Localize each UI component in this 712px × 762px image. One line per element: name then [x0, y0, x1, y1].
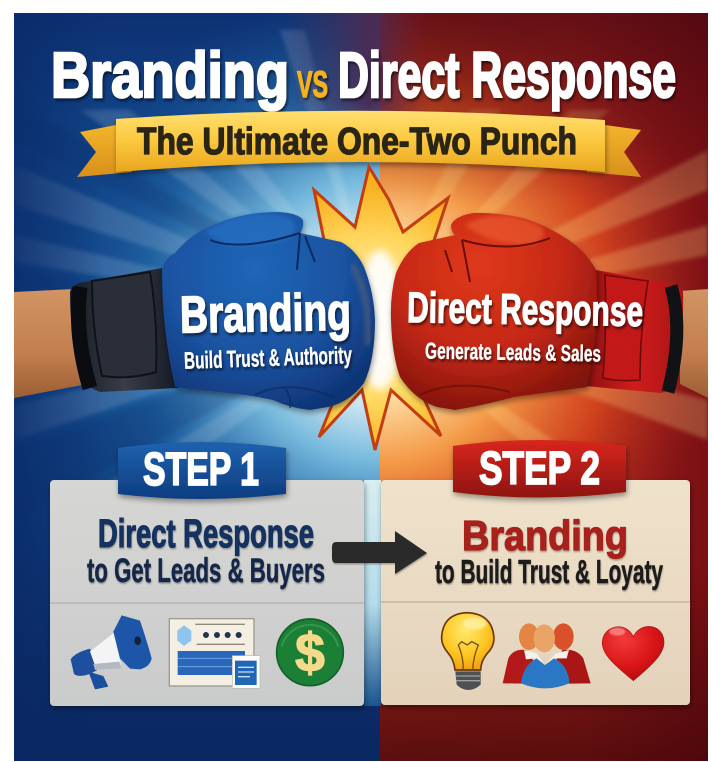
glove label: Branding: [179, 284, 353, 375]
arrow from step 1 to step 2: [332, 531, 427, 574]
impact starburst: [314, 167, 448, 450]
icon: dollar coin: $: [295, 624, 325, 683]
icon: people group: [503, 623, 591, 688]
step 1 heading: Direct Response: [98, 512, 314, 556]
banner: The Ultimate One-Two Punch: The Ultimate One-Two Punch: [137, 121, 577, 163]
left arm: [14, 289, 82, 398]
icon: heart: [602, 627, 664, 681]
title: Branding: [51, 39, 289, 111]
glove label: Direct Response: [407, 284, 643, 367]
glove label: Direct Response: Generate Leads & Sales: [425, 337, 601, 367]
icon: web form: [169, 619, 260, 688]
icon: light bulb: [442, 613, 494, 690]
glove label: Branding: Branding: [179, 284, 351, 344]
panel: step 2: [381, 480, 690, 705]
badge: step 2: STEP 2: [479, 442, 600, 494]
step 2 heading: [435, 512, 663, 590]
gap between panels: [364, 480, 381, 706]
icon: megaphone: [71, 615, 152, 689]
centre glow: [358, 250, 402, 390]
glove label: Branding: Build Trust & Authority: [184, 342, 353, 375]
step 1 heading: to Get Leads & Buyers: [87, 552, 325, 590]
right arm: [680, 289, 708, 398]
title: VS: [297, 64, 328, 105]
title: [51, 39, 676, 111]
panel: step 1: [50, 480, 364, 706]
badge: step 1: STEP 1: [143, 443, 259, 495]
step 1 heading: [87, 512, 325, 590]
blue boxing glove: [70, 212, 375, 410]
step 2 heading: Branding: [462, 512, 628, 559]
banner: The Ultimate One-Two Punch: [77, 111, 641, 177]
red boxing glove: [391, 213, 683, 410]
icon: dollar coin: [277, 619, 343, 686]
